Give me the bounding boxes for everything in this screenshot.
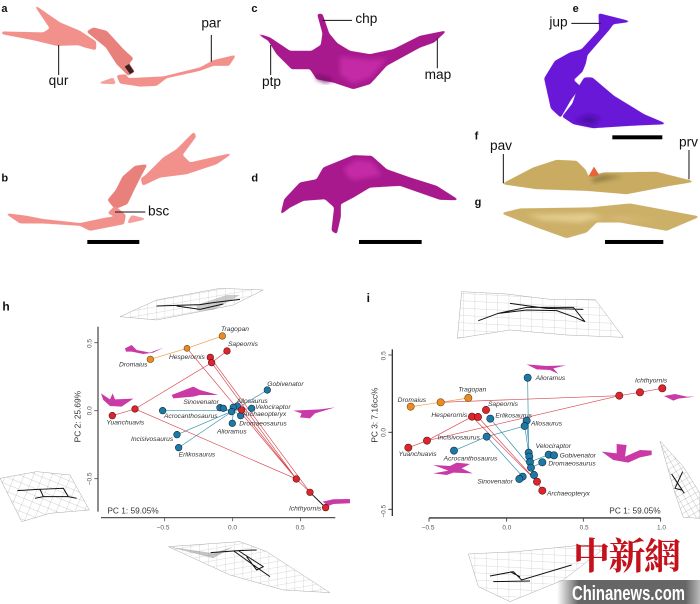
warp grid: top [120,288,263,320]
species labels: Archaeopteryx [546,491,591,498]
letter c: c [251,3,257,15]
axes: −0.5 [422,524,435,531]
warp grid: bottom [168,542,330,593]
axes [370,349,666,531]
label: map: map [425,67,452,82]
label: bsc: bsc [148,203,169,218]
species labels: Allosaurus [530,421,563,428]
label: chp [323,11,378,26]
letter b: b [1,172,8,184]
species labels: Sapeornis [228,341,259,348]
species labels: Sinovenator [183,399,220,406]
panel g: tan bone [475,196,700,244]
letter h: h [2,300,10,314]
species labels: Dromaius [398,397,427,404]
species labels: Allosaurus [236,398,268,405]
letter a: a [1,3,8,15]
letter e: e [573,3,579,15]
axes: 0.5 [381,351,388,360]
species labels [106,326,322,513]
species labels: Dromaius [119,362,148,369]
species labels: Alioramus [216,428,247,435]
letter f: f [475,130,479,142]
label: par: par [201,16,222,31]
label: ptp: ptp [262,74,281,89]
label: chp: chp [355,11,378,26]
label: bsc [115,203,169,218]
letter i: i [367,291,370,305]
axes: −0.5 [157,524,170,531]
warp grid: right [660,441,700,518]
species labels: Acrocanthosaurus [163,413,218,420]
scale bar [359,240,422,244]
label: map [425,38,452,82]
species labels: Erlikosaurus [179,452,216,459]
label: qur: qur [49,73,69,88]
panel e: violet bone [544,3,667,139]
letter d: d [251,172,258,184]
tree branches [408,378,662,491]
species labels: Alioramus [535,375,566,382]
axes: 0.5 [296,524,305,531]
label: jup: jup [548,15,568,30]
panel c: magenta bone [251,3,452,89]
species labels: Velociraptor [255,404,291,411]
species labels: Hesperornis [431,412,468,419]
species labels: Incisivosaurus [131,436,174,443]
data points [109,333,329,511]
axes: −0.5 [381,504,388,518]
panel d: magenta bone [251,155,459,244]
species labels: Hesperornis [169,354,206,361]
panel a: pink bones dorsal view [1,3,236,88]
axes: 1.0 [657,524,666,531]
scale bar [612,135,662,139]
species labels: Yuanchuavis [399,451,437,458]
label: pav: pav [490,138,512,153]
axes: 0.0 [381,428,388,437]
species labels: Gobivenator [560,452,597,459]
axes: 0.5 [87,339,94,348]
data points [405,374,666,494]
species labels: Gobivenator [267,381,304,388]
letter g: g [475,196,481,208]
species labels: Tragopan [458,387,487,394]
species labels: Ichthyornis [289,506,322,513]
axes: PC 1: 59.05% [107,506,159,516]
label: pav [490,138,512,183]
scale bar [605,240,663,244]
species labels: Sapeornis [488,401,519,408]
species labels: Erlikosaurus [495,413,533,420]
silhouettes [101,345,350,506]
label: prv: prv [679,135,698,150]
warp grid: left [0,472,89,522]
panel i: PCA scatter plot [367,291,700,602]
species labels: Sinovenator [477,478,514,485]
label: par [201,16,222,62]
species labels: Dromaeosaurus [548,460,596,467]
panel b: pink bones ventral view [1,132,233,244]
species labels: Incisivosaurus [438,435,481,442]
species labels [398,375,668,498]
orange marker [588,167,599,177]
panel f: tan bone lateral [475,130,698,194]
tree branches [112,336,326,508]
warp grid: top [457,292,623,338]
axes: −0.5 [87,472,94,485]
label: prv [679,135,698,179]
species labels: Dromaeosaurus [239,420,287,427]
axes [72,327,335,531]
axes: 0.5 [580,524,589,531]
axes: 0.0 [87,406,94,415]
label: ptp [262,45,281,89]
species labels: Acrocanthosaurus [443,455,498,462]
axes: 0.0 [228,524,237,531]
scale bar [87,240,139,244]
axes: PC 3: 7.16cc% [370,387,380,443]
species labels: Tragopan [221,326,249,333]
species labels: Yuanchuavis [106,419,145,426]
silhouettes [433,364,695,475]
species labels: Velociraptor [536,443,572,450]
label: qur [49,45,69,88]
panel h: PCA scatter plot [0,288,350,593]
axes: PC 1: 59.05% [609,506,661,516]
axes: PC 2: 25.69% [72,390,82,442]
warp grid: bottom [468,545,607,602]
watermark: Chinese characters: 中新網 [573,536,681,578]
species labels: Ichthyornis [635,377,668,384]
species labels: Archaeopteryx [242,411,287,418]
axes: 0.0 [502,524,512,531]
